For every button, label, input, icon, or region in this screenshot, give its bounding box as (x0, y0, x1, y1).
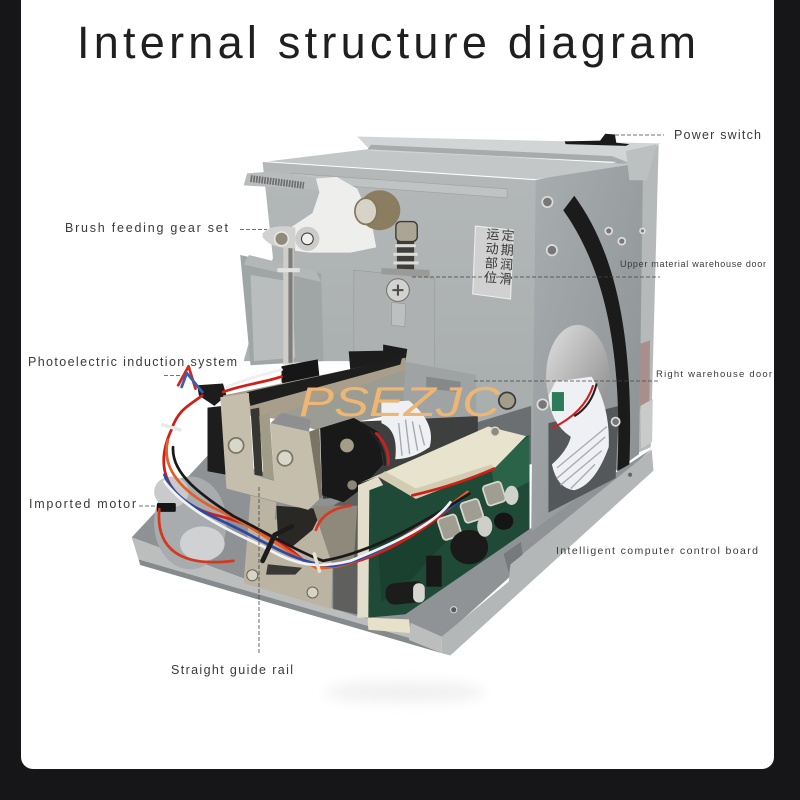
front panel (244, 162, 536, 464)
lubrication sticker: 润 (500, 257, 513, 272)
lubrication sticker: 运 (486, 226, 500, 242)
brush feeding gear set (244, 172, 430, 301)
label: Straight guide rail: Straight guide rail (171, 663, 293, 677)
label: Imported motor: Imported motor (29, 497, 136, 511)
lubrication sticker (473, 226, 515, 299)
control board (368, 435, 530, 618)
label: Photoelectric induction system: Photoelectric induction system (28, 355, 237, 369)
illustration: card dispenser mechanism (132, 134, 660, 656)
watermark: PSEZJC (299, 378, 501, 425)
metal clamp brackets (220, 393, 322, 510)
lubrication sticker: 动 (485, 241, 499, 257)
spring plunger (397, 241, 414, 272)
guide channel (223, 358, 406, 430)
rear channel (323, 345, 531, 616)
lower guide rail bracket (244, 495, 357, 609)
left bracket and shaft (240, 227, 324, 365)
right ribbon and wires (548, 377, 609, 490)
right end panel (639, 144, 659, 452)
ribbon cable (381, 401, 431, 459)
label: Upper material warehouse door: Upper material warehouse door (620, 259, 766, 269)
right side panel (531, 156, 645, 532)
base plate (132, 449, 652, 653)
black rubber strip (563, 196, 630, 471)
black side blocks (207, 406, 383, 502)
label: Brush feeding gear set: Brush feeding gear set (65, 221, 229, 235)
lubrication sticker: 定 (501, 228, 515, 244)
right side flange (409, 450, 653, 656)
lubrication sticker: 滑 (499, 271, 513, 287)
wiring harness (159, 366, 494, 571)
title: Internal structure diagram (77, 17, 696, 68)
label: Intelligent computer control board: Intelligent computer control board (556, 545, 758, 557)
lubrication sticker: 部 (484, 255, 498, 271)
lubrication sticker: 期 (500, 242, 514, 258)
power switch (565, 134, 629, 146)
floor shadow (325, 682, 485, 702)
upper hopper (268, 134, 660, 180)
sensors (197, 359, 320, 406)
ivory plastic housing (357, 427, 526, 633)
motor (154, 476, 226, 569)
label: Right warehouse door: Right warehouse door (656, 369, 772, 380)
lubrication sticker: 位 (484, 270, 498, 285)
label: Power switch: Power switch (674, 128, 761, 142)
